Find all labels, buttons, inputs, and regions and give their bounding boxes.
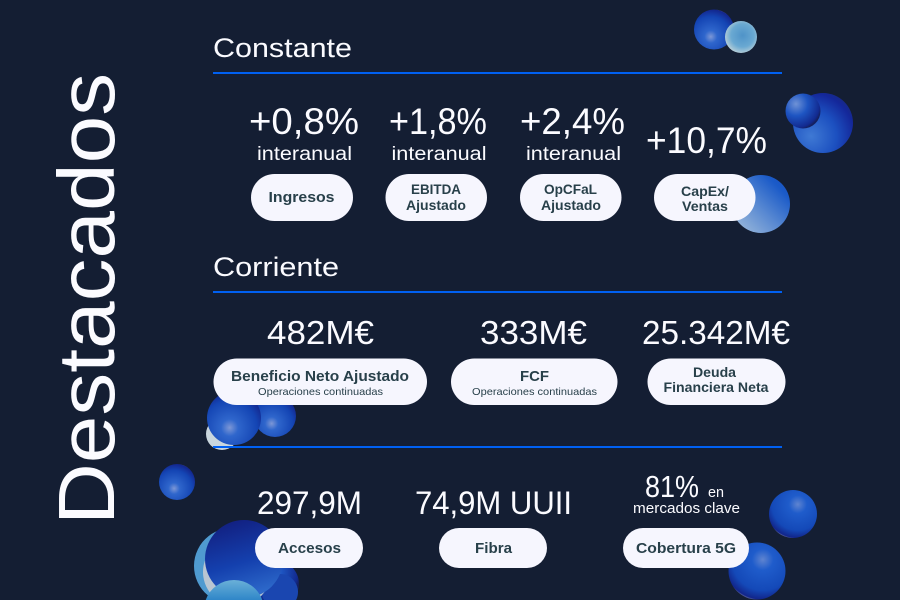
metric: Cobertura 5G: en: [708, 485, 724, 501]
metric: Accesos: [255, 485, 363, 568]
metric: Ingresos: +0,8%: [249, 101, 359, 142]
decorative spheres: upper right: [786, 93, 853, 153]
metric: EBITDA Ajustado: +1,8%: [389, 101, 487, 142]
metric: Beneficio Neto Ajustado: 482M€: [267, 314, 374, 351]
metric: FCF: Operaciones continuadas: [472, 386, 597, 398]
metric: FCF: 333M€: [480, 314, 587, 351]
metric: Accesos: Accesos: [278, 541, 341, 557]
heading: Corriente: Corriente: [213, 252, 339, 282]
decorative spheres: bottom right: [728, 490, 817, 600]
decorative spheres: bottom left cluster: [194, 520, 299, 600]
metric: CapEx/Ventas: +10,7%: [646, 120, 767, 161]
metric: Cobertura 5G: 81%: [645, 469, 699, 504]
metric: OpCFaL Ajustado: interanual: [526, 144, 621, 165]
metric: Ingresos: interanual: [257, 144, 352, 165]
metric: CapEx/Ventas: [646, 120, 767, 221]
metric: Deuda Financiera Neta: Deuda: [693, 365, 737, 380]
metric: Fibra: 74,9M UUII: [415, 485, 572, 521]
metric: Beneficio Neto Ajustado: Operaciones continuadas: [258, 386, 383, 398]
metric: Ingresos: [249, 101, 359, 221]
metric: Accesos: 297,9M: [257, 485, 362, 521]
metric: Deuda Financiera Neta: [642, 314, 790, 405]
metric: Cobertura 5G: [623, 469, 749, 568]
metric: Fibra: Fibra: [475, 541, 513, 557]
metric: Ingresos: Ingresos: [268, 189, 334, 206]
metric: Beneficio Neto Ajustado: Beneficio Neto Ajustado: [231, 368, 409, 385]
metric: OpCFaL Ajustado: OpCFaL: [544, 182, 597, 197]
metric: FCF: [451, 314, 618, 405]
metric: Deuda Financiera Neta: 25.342M€: [642, 314, 790, 351]
metric: CapEx/Ventas: CapEx/: [681, 184, 729, 199]
metric: Deuda Financiera Neta: Financiera Neta: [664, 380, 769, 395]
metric: EBITDA Ajustado: interanual: [392, 144, 486, 165]
metric: FCF: FCF: [520, 368, 549, 385]
decorative spheres: lower left cluster: [206, 391, 296, 450]
metric: OpCFaL Ajustado: Ajustado: [541, 198, 601, 213]
metric: Cobertura 5G: mercados clave: [633, 500, 740, 517]
decorative spheres: top: [694, 10, 757, 53]
metric: Cobertura 5G: Cobertura 5G: [636, 541, 736, 557]
metric: EBITDA Ajustado: [386, 101, 487, 221]
metric: EBITDA Ajustado: EBITDA: [411, 182, 461, 197]
metric: Fibra: [415, 485, 572, 568]
vertical title: Destacados: [42, 73, 131, 525]
decorative sphere: left small: [159, 464, 195, 500]
decorative sphere: behind CapEx pill: [732, 175, 790, 233]
divider: [213, 446, 782, 448]
metric: OpCFaL Ajustado: [520, 101, 625, 221]
metric: EBITDA Ajustado: Ajustado: [406, 198, 466, 213]
metric: OpCFaL Ajustado: +2,4%: [520, 101, 625, 142]
heading: Constante: Constante: [213, 33, 352, 63]
metric: Beneficio Neto Ajustado: [214, 314, 427, 405]
metric: CapEx/Ventas: Ventas: [682, 199, 728, 214]
